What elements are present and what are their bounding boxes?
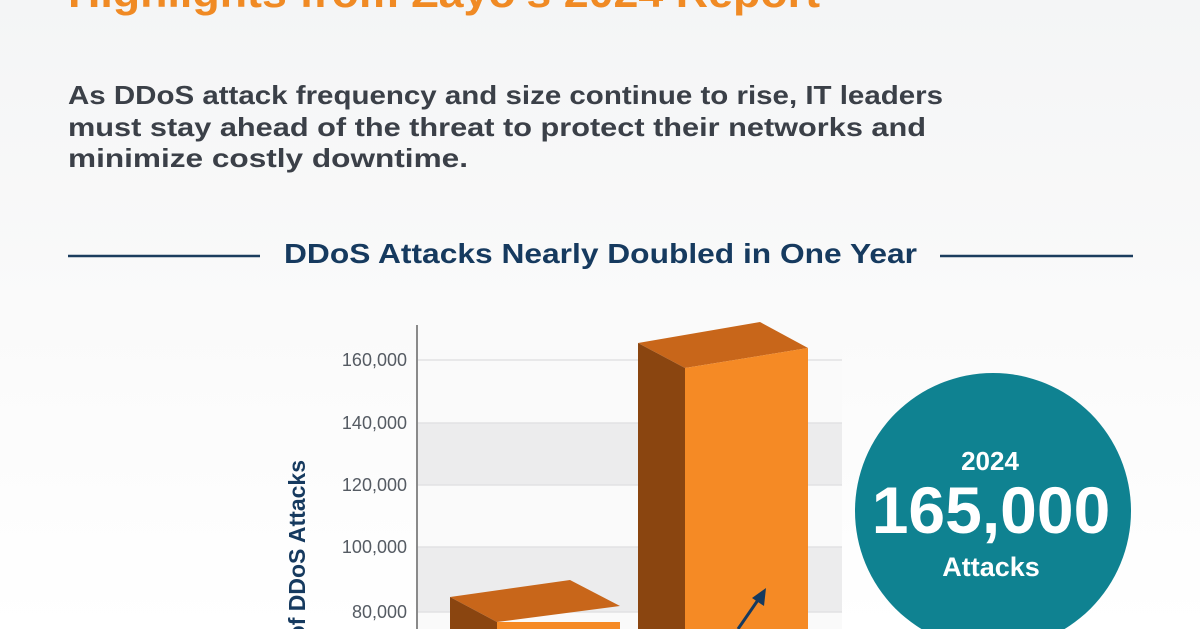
y axis tick labels: 120,000 — [342, 475, 407, 495]
subtitle text: must stay ahead of the threat to protect their networks and — [68, 112, 926, 142]
y axis tick labels — [342, 350, 407, 622]
y axis tick labels: 140,000 — [342, 413, 407, 433]
subtitle text: minimize costly downtime. — [68, 143, 468, 173]
bar chart — [284, 322, 842, 629]
subtitle text — [68, 80, 943, 173]
bar: 2023 — [450, 580, 620, 629]
y axis tick labels: 80,000 — [352, 602, 407, 622]
callout circle: 2024 165,000 attacks: 165,000 — [872, 473, 1110, 547]
y axis — [416, 325, 418, 629]
callout circle: 2024 165,000 attacks: 2024 — [961, 446, 1019, 476]
subtitle text: As DDoS attack frequency and size continue to rise, IT leaders — [68, 80, 943, 110]
arrow: increase — [738, 588, 766, 629]
bar: 2024 — [638, 322, 808, 629]
section heading: DDoS Attacks Nearly Doubled in One Year — [284, 238, 917, 269]
y axis tick labels: 160,000 — [342, 350, 407, 370]
callout circle: 2024 165,000 attacks — [855, 373, 1131, 629]
y axis tick labels: 100,000 — [342, 537, 407, 557]
callout circle: 2024 165,000 attacks: Attacks — [942, 552, 1040, 582]
